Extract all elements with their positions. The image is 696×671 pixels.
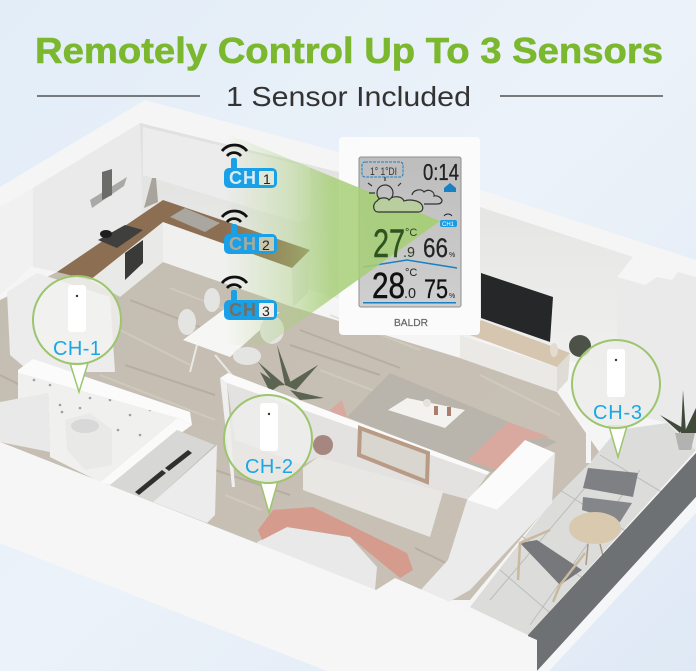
callout CH-3: CH-3 [593, 402, 642, 424]
oven [125, 240, 143, 280]
channel icon 3: 3 [262, 303, 270, 319]
closet side [153, 445, 217, 523]
dining table legs [190, 345, 240, 385]
sink [170, 208, 220, 232]
tv cabinet side [557, 353, 570, 392]
bathroom wall top [18, 359, 192, 425]
bedroom wall face [227, 383, 487, 500]
outdoor temperature decimal: .0 [404, 285, 416, 302]
range hood [90, 177, 127, 208]
indoor humidity: 66 [423, 233, 448, 263]
channel icon 2: 2 [262, 237, 270, 253]
gray armchair [582, 468, 638, 522]
home icon [444, 183, 456, 192]
gas stove [98, 225, 143, 248]
coffee table [388, 398, 465, 428]
weather icons [368, 177, 442, 212]
closet rails [135, 450, 192, 495]
lcd bottom line [363, 302, 456, 304]
flower pot [313, 435, 333, 455]
column wall face [418, 453, 555, 603]
balcony plant [660, 390, 696, 450]
cushion [330, 400, 347, 417]
dresser [303, 457, 443, 537]
bathroom vanity [65, 413, 112, 470]
balcony post [586, 397, 591, 463]
balcony white ledge [537, 497, 696, 671]
left wall end [0, 188, 33, 295]
wooden armchair [518, 530, 585, 602]
weather station device [339, 137, 480, 335]
closet divider wall [100, 418, 192, 485]
pot [100, 230, 112, 238]
outdoor unit: °C [405, 267, 417, 279]
kitchen base cabinet front [163, 222, 293, 307]
flowers on cabinet [569, 335, 591, 357]
date box [362, 162, 403, 177]
bedroom wall post [220, 378, 235, 487]
indoor temperature decimal: .9 [403, 244, 415, 261]
basin [71, 419, 99, 433]
indoor temperature: 27 [373, 222, 405, 266]
clock: 0:14 [423, 159, 459, 185]
laundry room box [7, 273, 115, 372]
bathroom speckles [33, 379, 151, 436]
lcd screen [359, 157, 461, 307]
sofa [467, 422, 550, 470]
brand: BALDR [394, 318, 428, 329]
dining chairs [178, 288, 284, 365]
channel icon 1: 1 [263, 171, 271, 187]
rug [347, 373, 557, 473]
vase on cabinet [550, 343, 558, 357]
table legs [586, 544, 604, 565]
bathroom door [0, 393, 50, 452]
television [481, 273, 553, 342]
front wall [0, 442, 537, 671]
vanity mirror [359, 428, 428, 482]
left wall face [33, 123, 143, 272]
tv cabinet top [470, 320, 570, 367]
channel icon 2: CH [229, 234, 256, 254]
hood chimney [102, 169, 112, 200]
indoor unit: °C [405, 227, 417, 239]
callout CH-3 [572, 340, 660, 457]
date text: 1° 1°DI [370, 166, 397, 178]
closet interior [110, 430, 215, 502]
bathroom wall face [18, 373, 177, 482]
green signal beam [225, 133, 440, 345]
column wall top [467, 440, 555, 510]
device body [339, 137, 480, 335]
divider curve [363, 260, 457, 268]
channel icon 2 [222, 211, 277, 254]
floor planks [0, 288, 560, 565]
pink blanket [258, 507, 413, 578]
callout CH-2 [224, 395, 312, 513]
bed base [257, 527, 377, 590]
channel icon 3 [222, 277, 277, 320]
tile lines [490, 455, 675, 630]
indoor percent: % [449, 252, 455, 259]
channel icon 3: CH [229, 300, 256, 320]
potted plant [258, 345, 324, 400]
channel icon 1: CH [229, 168, 256, 188]
vases [144, 178, 158, 208]
outdoor percent: % [449, 293, 455, 300]
subtitle: 1 Sensor Included [226, 81, 471, 112]
kitchen counter [57, 200, 310, 280]
kitchen left cabinets [90, 222, 163, 297]
small ch icon [440, 214, 457, 228]
outdoor temperature: 28 [372, 265, 405, 306]
round table [569, 512, 621, 544]
callout CH-2: CH-2 [245, 456, 293, 478]
back wall face [140, 123, 633, 372]
callout CH-1 [33, 276, 121, 392]
outdoor humidity: 75 [424, 274, 448, 304]
right wall panels [617, 272, 696, 450]
wood floor [0, 262, 600, 600]
kitchen base cabinet side [292, 250, 310, 307]
balcony glass panels [528, 453, 696, 671]
small ch icon: CH1 [442, 222, 455, 228]
kitchen upper cabinets [143, 127, 310, 223]
title: Remotely Control Up To 3 Sensors [35, 30, 663, 71]
callout CH-1: CH-1 [53, 338, 101, 360]
channel icon 1 [222, 145, 277, 188]
dining table [183, 310, 280, 357]
balcony tile floor [470, 423, 696, 635]
tv cabinet face [460, 335, 557, 392]
table decor [423, 399, 451, 416]
bedroom wall top [220, 373, 490, 475]
